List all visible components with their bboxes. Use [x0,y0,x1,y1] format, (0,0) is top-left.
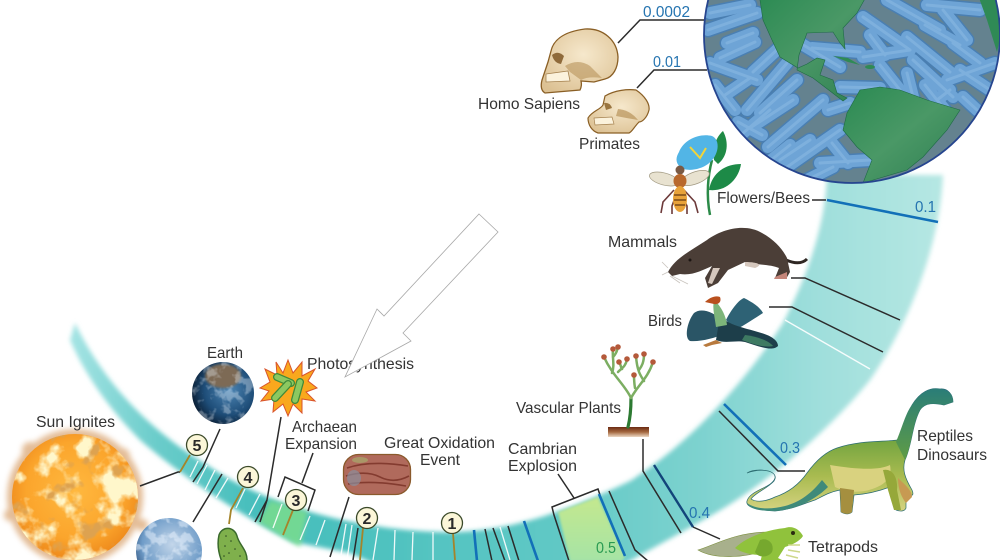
great oxidation label: Event [420,452,461,469]
bracket: cambrian explosion [552,474,600,560]
continent: north america [755,0,867,101]
bracket: archaean expansion [278,453,315,511]
photosynthesis label: Photosynthesis [307,356,414,373]
blue age markers [474,200,938,560]
cambrian explosion label: Cambrian [508,441,577,458]
primate skull [588,90,649,133]
vascular plants label: Vascular Plants [516,400,621,417]
numbered circles: 3 [292,493,301,510]
vascular plant [601,344,656,437]
moon [136,518,202,560]
bee [648,166,711,214]
continent: africa edge [978,0,1000,52]
flowers and bees label: Flowers/Bees [717,190,810,207]
homo sapiens skull [541,29,618,93]
numbered circles: 5 [193,438,202,455]
great oxidation rock [344,454,410,494]
age labels [540,4,936,560]
primates label: Primates [579,136,640,153]
mammal [662,228,807,288]
arrow outline [345,214,498,377]
numbered circles: 1 [448,516,457,533]
globe with bacteria [704,0,1000,183]
sun [4,429,148,560]
bacteria rods [708,0,995,182]
photosynthesis icon [260,360,317,416]
cambrian green zone [558,497,625,560]
reptiles dinosaurs label: Dinosaurs [917,447,987,464]
earth [192,362,254,424]
age labels: 0.01 [653,54,681,71]
navy marker 0.4 [654,465,720,539]
age labels: 0.0002 [643,4,690,21]
birds label: Birds [648,313,682,330]
archaean expansion label: Expansion [285,436,357,453]
great oxidation label: Great Oxidation [384,435,495,452]
timeline band [70,175,943,560]
age labels: 0.5 [596,540,616,557]
caribbean islands [833,56,875,69]
dinosaur [747,389,953,514]
homo sapiens label: Homo Sapiens [478,96,580,113]
age labels: 0.4 [689,505,710,522]
numbered circles: 2 [363,511,372,528]
numbered circles: 4 [244,470,253,487]
cambrian explosion label: Explosion [508,458,577,475]
numbered circles [186,434,462,534]
reptiles dinosaurs label: Reptiles [917,428,973,445]
rod highlights [708,0,995,182]
archaean green zone [258,500,308,547]
microbe [218,528,247,560]
flower [676,131,741,215]
age labels: 0.3 [780,440,800,457]
archaean expansion label: Archaean [292,419,357,436]
timeline connector lines [140,20,900,560]
sun label: Sun Ignites [36,414,115,431]
age labels: 0.1 [915,199,936,216]
earth label: Earth [207,345,243,362]
ochre marker lines [180,455,455,560]
tetrapods label: Tetrapods [808,539,878,556]
tetrapod frog [698,527,803,560]
mammals label: Mammals [608,234,677,251]
continent: south america [843,87,960,183]
bird [687,296,778,349]
white ticks [190,320,870,560]
rod bodies [708,0,995,182]
